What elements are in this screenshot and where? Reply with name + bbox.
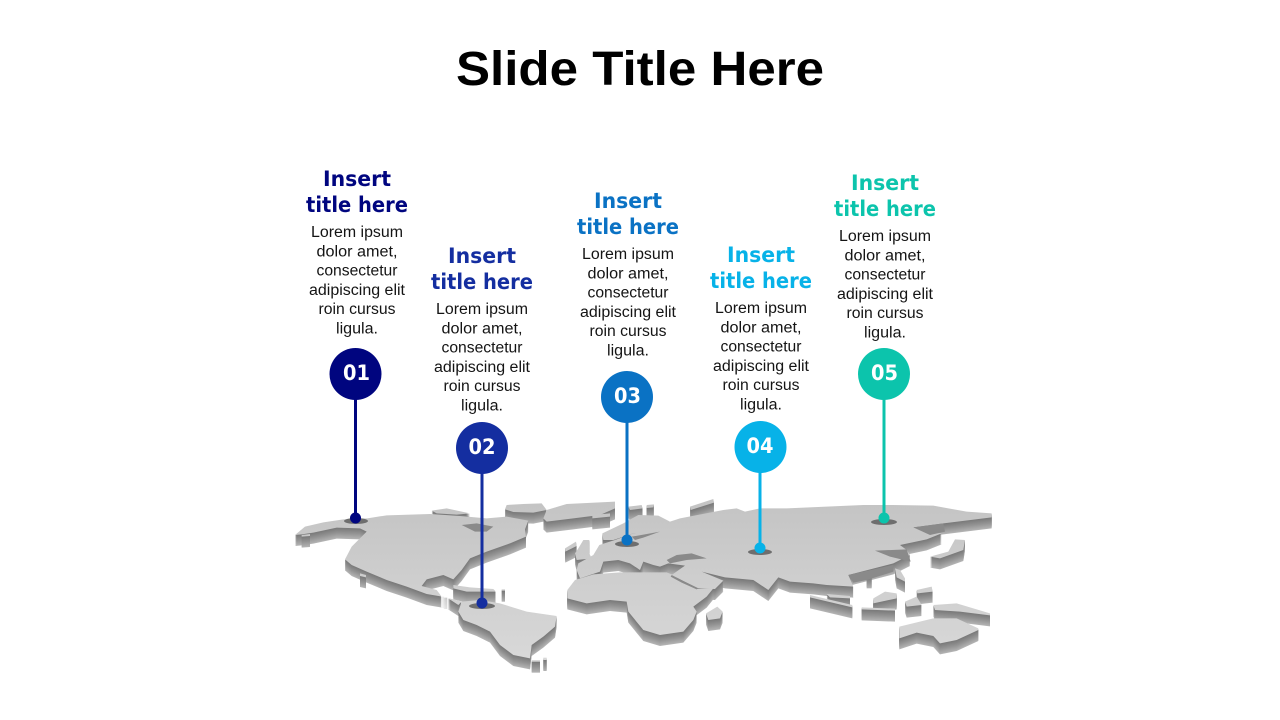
- body text 03: adipiscing elit: [580, 304, 677, 321]
- heading 03: [577, 189, 679, 239]
- body text 02: consectetur: [442, 340, 522, 357]
- location 04: [710, 243, 812, 555]
- title: Slide Title Here: [456, 43, 824, 96]
- heading 03: Insert: [594, 189, 662, 213]
- pin 02: [456, 422, 508, 609]
- heading 05: Insert: [851, 171, 919, 195]
- heading 01: Insert: [323, 167, 391, 191]
- body text 02: adipiscing elit: [434, 359, 531, 376]
- heading 04: [710, 243, 812, 293]
- heading 02: title here: [431, 270, 533, 294]
- body text 05: consectetur: [844, 267, 926, 284]
- heading 04: title here: [710, 269, 812, 293]
- body text 03: ligula.: [607, 342, 649, 360]
- location 05: [834, 171, 936, 525]
- body text 04: consectetur: [720, 339, 802, 356]
- body text 04: Lorem ipsum: [715, 300, 807, 317]
- pin 01: 01: [343, 361, 370, 385]
- body text 05: roin cursus: [846, 305, 924, 322]
- body text 05: dolor amet,: [844, 247, 926, 264]
- body text 04: ligula.: [740, 396, 782, 414]
- pin 04: [734, 421, 786, 555]
- heading 05: [834, 171, 936, 221]
- body text 02: ligula.: [461, 398, 503, 414]
- location 01: [306, 167, 408, 524]
- body text 02: dolor amet,: [442, 320, 522, 337]
- heading 05: title here: [834, 197, 936, 221]
- body text 02: Lorem ipsum: [436, 301, 528, 318]
- heading 02: Insert: [448, 244, 516, 268]
- pin 02: 02: [468, 435, 496, 459]
- pin 01: [330, 348, 382, 524]
- body text 02: roin cursus: [444, 378, 521, 395]
- body text 04: roin cursus: [722, 377, 800, 394]
- body text 05: ligula.: [864, 324, 906, 342]
- body text 03: roin cursus: [590, 323, 667, 340]
- heading 01: [306, 167, 408, 217]
- pin 03: 03: [614, 384, 641, 408]
- body text 01: dolor amet,: [316, 243, 398, 260]
- pin 05: 05: [871, 361, 898, 385]
- body text 05: [837, 228, 934, 342]
- heading 02: [431, 244, 533, 294]
- body text 03: consectetur: [588, 285, 668, 302]
- body text 01: [309, 224, 406, 338]
- body text 05: adipiscing elit: [837, 286, 934, 303]
- body text 01: adipiscing elit: [309, 282, 406, 299]
- heading 04: Insert: [727, 243, 795, 267]
- body text 03: Lorem ipsum: [582, 246, 674, 263]
- body text 01: consectetur: [316, 263, 398, 280]
- body text 03: dolor amet,: [588, 265, 668, 282]
- location 03: [577, 189, 679, 547]
- body text 01: Lorem ipsum: [311, 224, 403, 241]
- body text 04: [713, 300, 810, 414]
- body text 03: [580, 246, 677, 360]
- body text 01: ligula.: [336, 320, 378, 338]
- location 02: [431, 244, 533, 609]
- body text 01: roin cursus: [318, 301, 396, 318]
- pin 05: [858, 348, 910, 525]
- heading 01: title here: [306, 193, 408, 217]
- heading 03: title here: [577, 215, 679, 239]
- body text 05: Lorem ipsum: [839, 228, 931, 245]
- pin 03: [601, 371, 653, 547]
- body text 04: dolor amet,: [720, 319, 802, 336]
- body text 02: [434, 301, 531, 414]
- body text 04: adipiscing elit: [713, 358, 810, 375]
- world map: [295, 499, 992, 673]
- pin 04: 04: [746, 434, 774, 458]
